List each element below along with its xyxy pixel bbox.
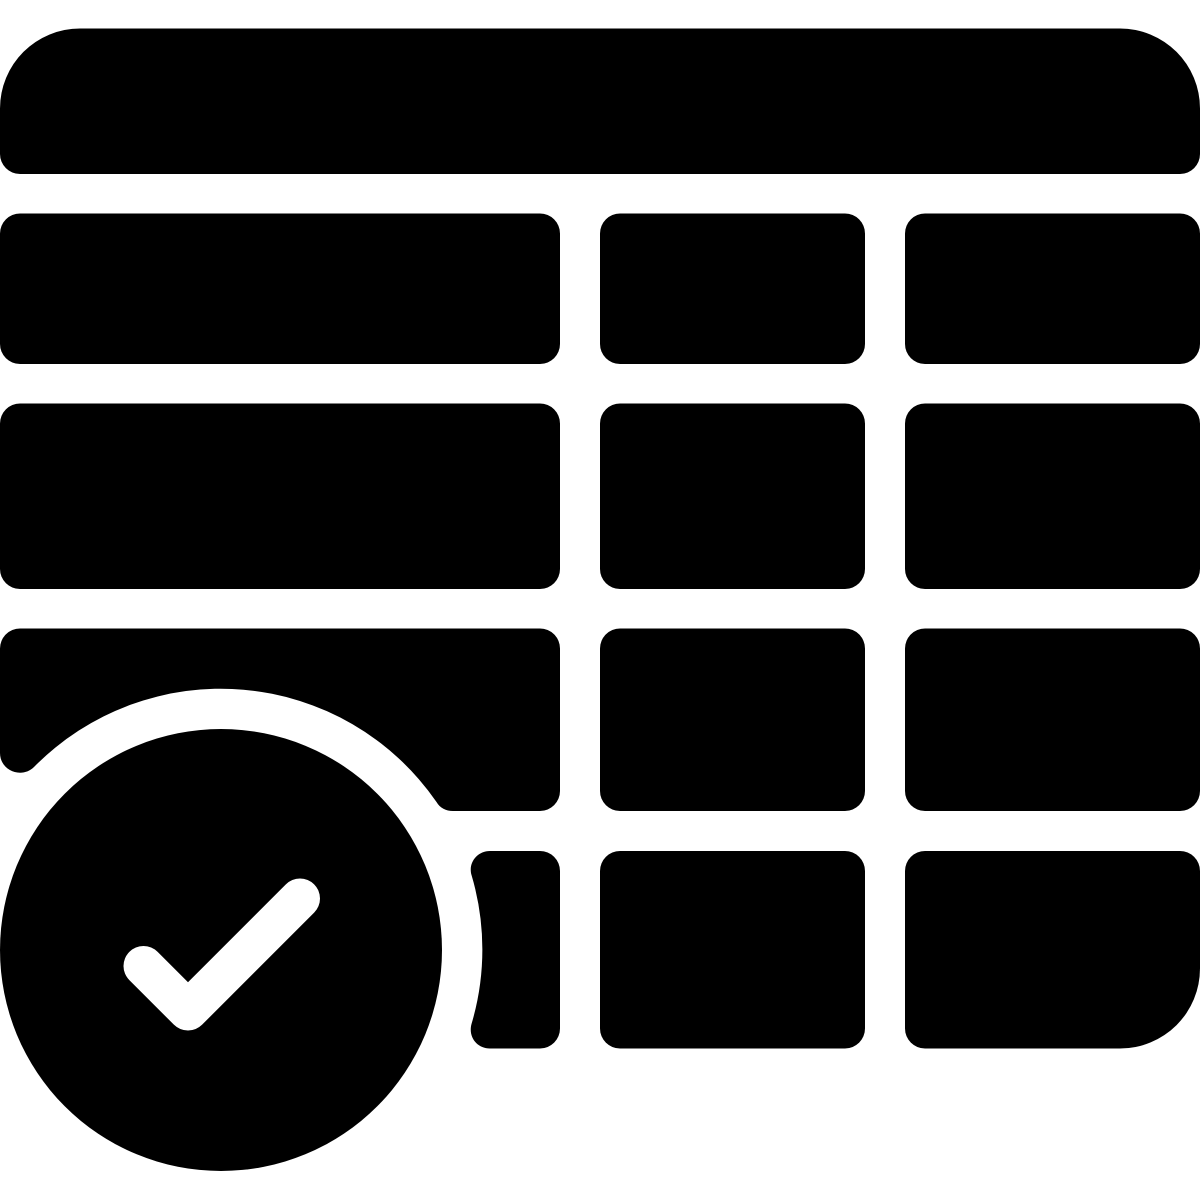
row 4 cells — [471, 851, 1200, 1048]
row 2 cells — [0, 404, 1200, 589]
check mark — [144, 898, 300, 1010]
table header bar — [0, 28, 1200, 174]
check badge — [0, 729, 442, 1171]
row 1 cells — [0, 214, 1200, 364]
row 3 cells — [0, 628, 1200, 811]
